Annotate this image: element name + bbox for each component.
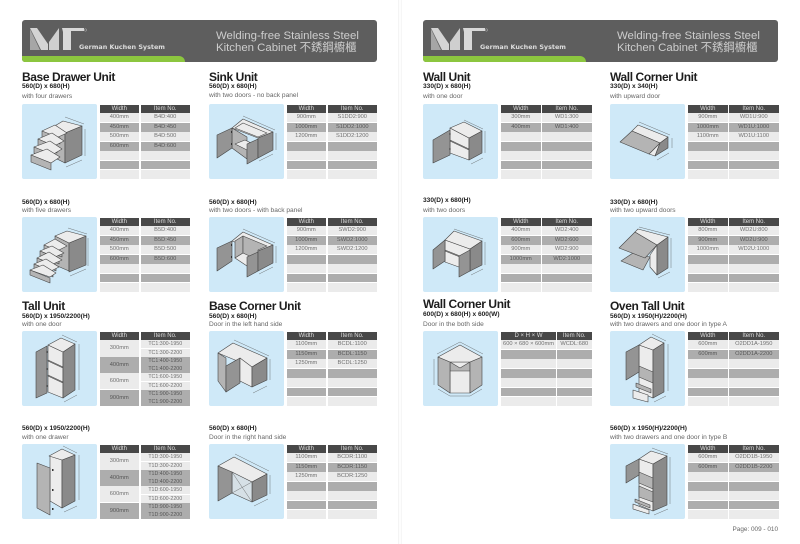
table: widths and item numbers: 300mm (511, 114, 530, 120)
icon: four drawer cabinet (22, 104, 97, 179)
table: widths and item numbers: WD1U:900 (740, 114, 768, 120)
table: dimensions and item numbers: 600 × 680 × 600mm (503, 341, 554, 347)
table: widths and item numbers: 600mm (110, 143, 129, 149)
heading: Wall Corner Unit (610, 70, 697, 84)
table: widths and item numbers: 500mm (110, 133, 129, 139)
table: widths and item numbers (501, 218, 592, 292)
dimensions: 600(D) x 680(H) x 600(W) (423, 311, 500, 318)
table: widths and item numbers: Width (700, 446, 715, 452)
table: widths and item numbers: T1D:600-2200 (148, 496, 182, 502)
table: widths and item numbers: 600mm (698, 341, 717, 347)
table: widths and item numbers: 600mm (698, 351, 717, 357)
table: widths and item numbers: Item No. (154, 446, 177, 452)
table: widths and item numbers: T1D:400-2200 (148, 479, 182, 485)
table: widths and item numbers: 600mm (110, 256, 129, 262)
table: dimensions and item numbers: D × H × W (514, 333, 542, 339)
table: widths and item numbers: 900mm (511, 246, 530, 252)
heading: Wall Corner Unit (423, 297, 510, 311)
table: widths and item numbers: Item No. (341, 219, 364, 225)
table: widths and item numbers: Width (513, 219, 528, 225)
table: widths and item numbers: BCDL:1250 (338, 360, 367, 366)
panel: sink unit, with back panel (209, 199, 377, 292)
table: widths and item numbers: Width (112, 333, 127, 339)
panel: wall unit, two doors (423, 197, 592, 292)
table: widths and item numbers: 600mm (511, 237, 530, 243)
table: widths and item numbers: Item No. (555, 106, 578, 112)
table: widths and item numbers: 1100mm (697, 133, 719, 139)
heading: Wall Unit (423, 70, 470, 84)
table: widths and item numbers: O2DD1A-2200 (735, 351, 772, 357)
panel: sink unit, no back panel (209, 70, 377, 179)
table: widths and item numbers: Width (513, 106, 528, 112)
panel: base corner unit, right hand door (209, 425, 377, 519)
icon: wall cabinet two upward doors (610, 217, 685, 292)
table: widths and item numbers: Width (700, 106, 715, 112)
table: widths and item numbers: 900mm (297, 227, 316, 233)
table: widths and item numbers: 900mm (110, 395, 129, 401)
panel: wall corner unit, upward door (610, 70, 779, 179)
panel: tall unit, one door (22, 299, 190, 406)
table: widths and item numbers: Item No. (742, 333, 765, 339)
table: widths and item numbers: Item No. (742, 446, 765, 452)
table: widths and item numbers: T1D:300-1950 (148, 454, 182, 460)
table: widths and item numbers: 1100mm (295, 341, 317, 347)
table: widths and item numbers: BCDL:1100 (338, 341, 367, 347)
table: widths and item numbers (688, 218, 779, 292)
table: widths and item numbers: Width (299, 446, 314, 452)
description: with two upward doors (610, 207, 676, 214)
dimensions: 560(D) x 1950/2200(H) (22, 313, 90, 320)
panel: wall unit, two upward doors (610, 199, 779, 292)
table: widths and item numbers: Width (700, 333, 715, 339)
table: widths and item numbers: BCDR:1150 (337, 464, 367, 470)
header title line 1: Welding-free Stainless Steel (617, 30, 760, 42)
table: widths and item numbers: Item No. (341, 333, 364, 339)
table: widths and item numbers: 400mm (110, 114, 129, 120)
table: widths and item numbers: 1250mm (295, 473, 317, 479)
table: widths and item numbers (688, 105, 779, 179)
table: widths and item numbers: 600mm (110, 491, 129, 497)
table: widths and item numbers: T1D:900-1950 (148, 504, 182, 510)
page number: Page: 009 - 010 (733, 526, 778, 533)
table: widths and item numbers: 600mm (698, 454, 717, 460)
green accent bar (423, 56, 586, 62)
table: widths and item numbers: TC1:900-2200 (148, 399, 182, 405)
table: widths and item numbers: 400mm (110, 362, 129, 368)
table: widths and item numbers (287, 445, 377, 519)
table: dimensions and item numbers: WCDL:680 (560, 341, 588, 347)
table: widths and item numbers: 900mm (297, 114, 316, 120)
table: widths and item numbers: S1DD2:900 (338, 114, 367, 120)
panel: tall unit, one drawer (22, 425, 190, 519)
table: widths and item numbers: 900mm (110, 508, 129, 514)
table: widths and item numbers (100, 332, 190, 406)
table: widths and item numbers: WD1:300 (555, 114, 579, 120)
table: widths and item numbers: BCDL:1150 (338, 351, 367, 357)
table: widths and item numbers: Width (112, 219, 127, 225)
description: with one door (22, 321, 62, 328)
table: widths and item numbers: BCDR:1100 (337, 454, 367, 460)
panel: wall corner unit, both side doors (423, 297, 592, 406)
table: widths and item numbers: O2DD1A-1950 (735, 341, 772, 347)
table: widths and item numbers: T1D:900-2200 (148, 512, 182, 518)
table: widths and item numbers: Width (299, 333, 314, 339)
table: widths and item numbers: T1D:400-1950 (148, 471, 182, 477)
table: widths and item numbers: Item No. (742, 219, 765, 225)
brand tagline: German Kuchen System (79, 43, 165, 51)
table: widths and item numbers: 500mm (110, 246, 129, 252)
table: widths and item numbers: WD2U:800 (740, 227, 768, 233)
dimensions: 560(D) x 1950(H)/2200(H) (610, 425, 687, 432)
table: widths and item numbers: Width (700, 219, 715, 225)
table: dimensions and item numbers: Item No. (563, 333, 586, 339)
table: widths and item numbers: B4D:450 (154, 124, 176, 130)
table: widths and item numbers: B4D:400 (154, 114, 176, 120)
dimensions: 560(D) x 680(H) (209, 313, 257, 320)
table: widths and item numbers: WD2:900 (555, 246, 579, 252)
table: widths and item numbers: B5D:400 (154, 227, 176, 233)
table: widths and item numbers: TC1:300-2200 (148, 350, 182, 356)
description: with one drawer (22, 434, 69, 441)
description: with upward door (610, 93, 660, 100)
table: widths and item numbers: 400mm (110, 475, 129, 481)
table: widths and item numbers: 1000mm (295, 124, 317, 130)
table: widths and item numbers: 400mm (511, 227, 530, 233)
dimensions: 330(D) x 340(H) (610, 83, 658, 90)
dimensions: 330(D) x 680(H) (423, 83, 471, 90)
left page header banner (22, 20, 377, 62)
table: widths and item numbers: Width (299, 106, 314, 112)
dimensions: 330(D) x 680(H) (610, 199, 658, 206)
table: widths and item numbers: 900mm (698, 237, 717, 243)
table: widths and item numbers: Width (299, 219, 314, 225)
icon: MT logo (431, 28, 488, 50)
green accent bar (22, 56, 185, 62)
brand tagline: German Kuchen System (480, 43, 566, 51)
table: dimensions and item numbers (501, 332, 592, 406)
icon: five drawer cabinet (22, 217, 97, 292)
table: widths and item numbers: 1100mm (295, 454, 317, 460)
table: widths and item numbers: 1250mm (295, 360, 317, 366)
right page header banner (423, 20, 778, 62)
panel: wall unit, one door (423, 70, 592, 179)
table: widths and item numbers (688, 445, 779, 519)
heading: Base Drawer Unit (22, 70, 115, 84)
table: widths and item numbers: WD2U:900 (740, 237, 768, 243)
dimensions: 560(D) x 680(H) (209, 199, 257, 206)
table: widths and item numbers: 400mm (110, 227, 129, 233)
table: widths and item numbers: WD2:600 (555, 237, 579, 243)
table: widths and item numbers (501, 105, 592, 179)
table: widths and item numbers: B5D:600 (154, 256, 176, 262)
table: widths and item numbers: WD2:400 (555, 227, 579, 233)
table: widths and item numbers: TC1:400-1950 (148, 358, 182, 364)
table: widths and item numbers: TC1:300-1950 (148, 341, 182, 347)
icon: sink cabinet open doors (209, 104, 284, 179)
table: widths and item numbers: Item No. (154, 333, 177, 339)
table: widths and item numbers: WD2:1000 (553, 256, 580, 262)
description: with two doors - with back panel (209, 207, 302, 214)
icon: oven tall cabinet type A (610, 331, 685, 406)
icon: base corner cabinet right door (209, 444, 284, 519)
header title line 1: Welding-free Stainless Steel (216, 30, 359, 42)
table: widths and item numbers: 450mm (110, 124, 129, 130)
table: widths and item numbers: 1000mm (697, 124, 719, 130)
icon: diagonal wall corner cabinet (423, 331, 498, 406)
panel: base corner unit, left hand door (209, 299, 377, 406)
icon: sink cabinet with back panel (209, 217, 284, 292)
table: widths and item numbers (100, 218, 190, 292)
table: widths and item numbers: B4D:500 (154, 133, 176, 139)
table: widths and item numbers: SWD2:1200 (337, 246, 368, 252)
panel: base drawer unit, five drawers (22, 199, 190, 292)
table: widths and item numbers: 1000mm (697, 246, 719, 252)
table: widths and item numbers: S1DD2:1200 (336, 133, 369, 139)
table: widths and item numbers: WD1:400 (555, 124, 579, 130)
description: with two doors - no back panel (209, 92, 298, 99)
icon: base corner cabinet left door (209, 331, 284, 406)
table: widths and item numbers: S1DD2:1000 (336, 124, 369, 130)
panel: base drawer unit, four drawers (22, 70, 190, 179)
table: widths and item numbers: B4D:600 (154, 143, 176, 149)
panel: oven tall unit type B (610, 425, 779, 519)
icon: wall cabinet two doors (423, 217, 498, 292)
table: widths and item numbers: WD2U:1000 (738, 246, 769, 252)
dimensions: 560(D) x 680(H) (209, 425, 257, 432)
dimensions: 330(D) x 680(H) (423, 197, 471, 204)
description: with four drawers (22, 93, 72, 100)
table: widths and item numbers: WD1U:1100 (738, 133, 769, 139)
table: widths and item numbers: 400mm (511, 124, 530, 130)
icon: oven tall cabinet type B (610, 444, 685, 519)
table: widths and item numbers: BCDR:1250 (337, 473, 367, 479)
icon: wall cabinet one door (423, 104, 498, 179)
table: widths and item numbers: 600mm (698, 464, 717, 470)
table: widths and item numbers: Item No. (555, 219, 578, 225)
table: widths and item numbers: Item No. (154, 106, 177, 112)
table: widths and item numbers: Width (112, 446, 127, 452)
table: widths and item numbers: T1D:300-2200 (148, 462, 182, 468)
table: widths and item numbers: Width (112, 106, 127, 112)
table: widths and item numbers: SWD2:1000 (337, 237, 368, 243)
description: with one door (423, 93, 463, 100)
header title line 2: Kitchen Cabinet 不銹鋼櫥櫃 (617, 42, 758, 54)
table: widths and item numbers: 1150mm (295, 351, 317, 357)
table: widths and item numbers: 600mm (110, 378, 129, 384)
dimensions: 560(D) x 680(H) (22, 199, 70, 206)
description: with two drawers and one door in type B (610, 434, 727, 441)
table: widths and item numbers (688, 332, 779, 406)
description: Door in the right hand side (209, 434, 286, 441)
dimensions: 560(D) x 1950/2200(H) (22, 425, 90, 432)
table: widths and item numbers: 450mm (110, 237, 129, 243)
table: widths and item numbers: Item No. (341, 446, 364, 452)
table: widths and item numbers: TC1:600-1950 (148, 374, 182, 380)
heading: Sink Unit (209, 70, 257, 84)
header title line 2: Kitchen Cabinet 不銹鋼櫥櫃 (216, 42, 357, 54)
table: widths and item numbers: T1D:600-1950 (148, 487, 182, 493)
dimensions: 560(D) x 680(H) (22, 83, 70, 90)
table: widths and item numbers (287, 105, 377, 179)
table: widths and item numbers: TC1:600-2200 (148, 382, 182, 388)
table: widths and item numbers: 300mm (110, 345, 129, 351)
table: widths and item numbers: Item No. (341, 106, 364, 112)
icon: wall cabinet upward door (610, 104, 685, 179)
panel: oven tall unit type A (610, 299, 779, 406)
table: widths and item numbers: WD1U:1000 (738, 124, 769, 130)
description: with two drawers and one door in type A (610, 321, 727, 328)
heading: Oven Tall Unit (610, 299, 684, 313)
table: widths and item numbers: SWD2:900 (338, 227, 366, 233)
table: widths and item numbers: 800mm (698, 227, 717, 233)
heading: Tall Unit (22, 299, 65, 313)
icon: tall cabinet with door (22, 331, 97, 406)
table: widths and item numbers: B5D:450 (154, 237, 176, 243)
icon: MT logo (30, 28, 87, 50)
description: with five drawers (22, 207, 71, 214)
description: Door in the left hand side (209, 321, 282, 328)
table: widths and item numbers: 300mm (110, 458, 129, 464)
heading: Base Corner Unit (209, 299, 301, 313)
dimensions: 560(D) x 1950(H)/2200(H) (610, 313, 687, 320)
table: widths and item numbers: O2DD1B-2200 (735, 464, 772, 470)
table: widths and item numbers: 1000mm (510, 256, 532, 262)
description: Door in the both side (423, 321, 484, 328)
table: widths and item numbers (100, 445, 190, 519)
table: widths and item numbers: 1000mm (295, 237, 317, 243)
table: widths and item numbers: 900mm (698, 114, 717, 120)
table: widths and item numbers: TC1:900-1950 (148, 391, 182, 397)
table: widths and item numbers (287, 218, 377, 292)
table: widths and item numbers: 1200mm (295, 246, 317, 252)
table: widths and item numbers: B5D:500 (154, 246, 176, 252)
description: with two doors (423, 207, 465, 214)
table: widths and item numbers: TC1:400-2200 (148, 366, 182, 372)
icon: tall cabinet with open door (22, 444, 97, 519)
table: widths and item numbers: Item No. (742, 106, 765, 112)
table: widths and item numbers: 1150mm (295, 464, 317, 470)
table: widths and item numbers (287, 332, 377, 406)
table: widths and item numbers: 1200mm (295, 133, 317, 139)
table: widths and item numbers: Item No. (154, 219, 177, 225)
dimensions: 560(D) x 680(H) (209, 83, 257, 90)
table: widths and item numbers: O2DD1B-1950 (735, 454, 772, 460)
table: widths and item numbers (100, 105, 190, 179)
